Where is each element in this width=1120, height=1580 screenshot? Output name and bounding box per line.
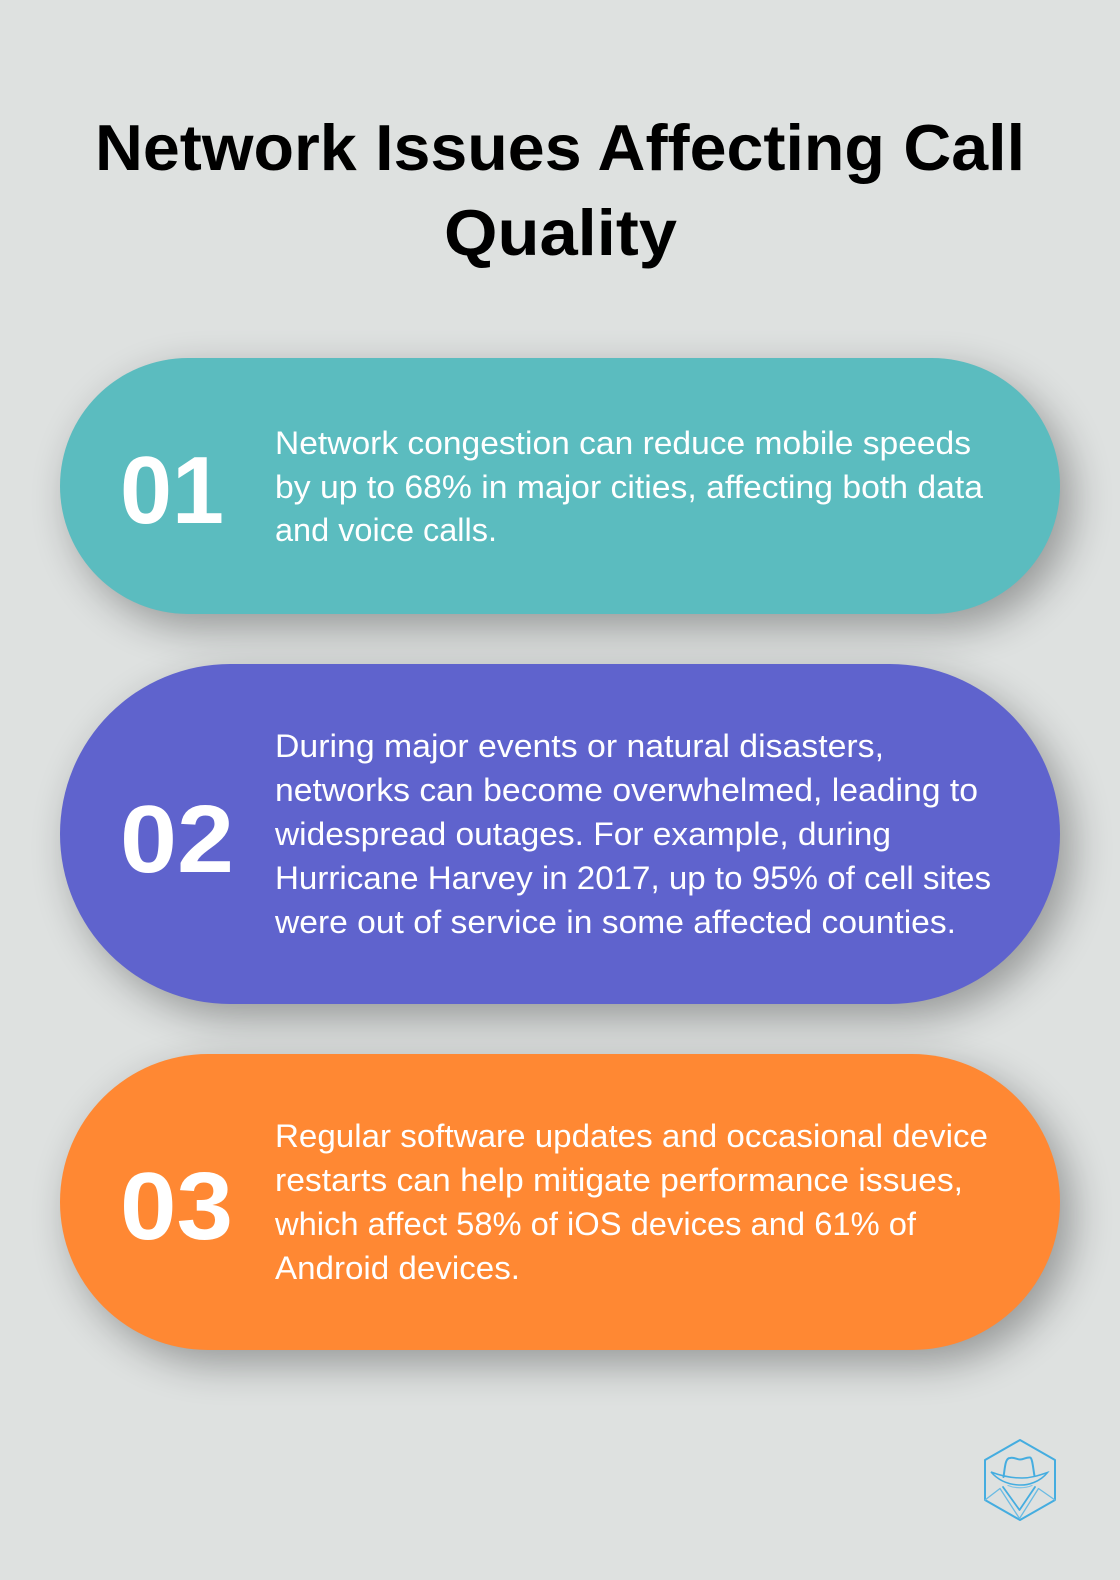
text: updates and restarts: Android devices. bbox=[275, 1250, 520, 1286]
icon: spy logo hexagon bbox=[984, 1439, 1056, 1521]
number 02: 02 bbox=[120, 786, 234, 893]
text: major events and outages: networks can become overwhelmed, leading to bbox=[275, 772, 978, 808]
text: updates and restarts bbox=[274, 1118, 988, 1286]
text: major events and outages: were out of service in some affected counties. bbox=[274, 904, 956, 940]
text: network congestion: Network congestion can reduce mobile speeds bbox=[275, 425, 971, 461]
text: major events and outages: Hurricane Harvey in 2017, up to 95% of cell sites bbox=[275, 860, 991, 896]
title: Quality bbox=[444, 196, 677, 269]
panel: step 02 overwhelmed networks bbox=[60, 664, 1060, 1004]
panel: step 03 software updates bbox=[60, 1054, 1060, 1350]
panel: step 01 network congestion bbox=[60, 358, 1060, 614]
text: major events and outages: During major events or natural disasters, bbox=[275, 728, 884, 764]
text: network congestion: by up to 68% in major cities, affecting both data bbox=[275, 469, 984, 505]
text: updates and restarts: restarts can help mitigate performance issues, bbox=[275, 1162, 963, 1198]
text: major events and outages: widespread outages. For example, during bbox=[274, 816, 891, 852]
title: Network Issues Affecting Call bbox=[95, 111, 1025, 184]
number 01: 01 bbox=[120, 437, 224, 544]
text: updates and restarts: Regular software updates and occasional device bbox=[275, 1118, 988, 1154]
title bbox=[95, 111, 1025, 269]
number 03: 03 bbox=[120, 1153, 233, 1260]
text: major events and outages bbox=[274, 728, 991, 940]
text: network congestion bbox=[275, 425, 984, 548]
text: network congestion: and voice calls. bbox=[275, 512, 497, 548]
text: updates and restarts: which affect 58% of iOS devices and 61% of bbox=[274, 1206, 917, 1242]
